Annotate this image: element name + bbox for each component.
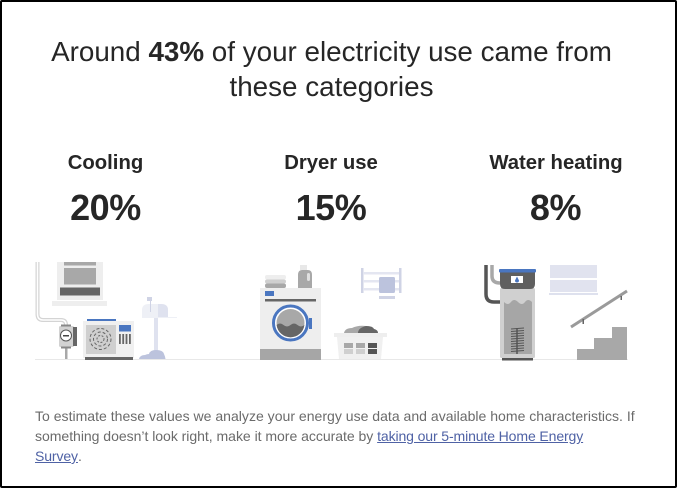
footer note: To estimate these values we analyze your energy use data and available home characteristics. If (35, 408, 635, 424)
category: cooling: 20% (70, 187, 141, 228)
category: cooling: Cooling (68, 152, 143, 174)
category: cooling (68, 152, 143, 228)
footer note: something doesn’t look right, make it more accurate by taking our 5-minute Home Energy (35, 428, 583, 444)
icon: drying rack (361, 268, 402, 299)
icon: laundry basket (334, 326, 387, 359)
title (51, 36, 612, 102)
icon: pipe (38, 262, 66, 328)
category: dryer use: 15% (296, 187, 366, 228)
title: these categories (230, 71, 433, 102)
icon: folded clothes (265, 275, 286, 288)
category: water heating (489, 152, 623, 228)
icon: window blinds (549, 265, 598, 294)
icon: water heater (499, 269, 536, 360)
category: water heating: 8% (530, 187, 581, 228)
category: dryer use: Dryer use (284, 152, 378, 174)
title: Around 43% of your electricity use came from (51, 36, 612, 67)
category: water heating: Water heating (489, 152, 623, 174)
icon: pipes (486, 265, 501, 302)
icon: window (52, 262, 107, 306)
icon: staircase with handrail (571, 291, 627, 360)
illustration: cooling (38, 262, 177, 360)
icon: air conditioner (83, 319, 134, 360)
category: dryer use (284, 152, 378, 228)
icon: mailbox (139, 297, 177, 359)
footer note: Survey. (35, 448, 82, 464)
footer note (35, 408, 635, 464)
illustration: water heating (486, 265, 627, 360)
icon: electric meter (59, 324, 77, 359)
icon: washing machine (260, 288, 321, 360)
icon: detergent bottle (298, 265, 312, 288)
illustration: dryer use (260, 265, 402, 360)
